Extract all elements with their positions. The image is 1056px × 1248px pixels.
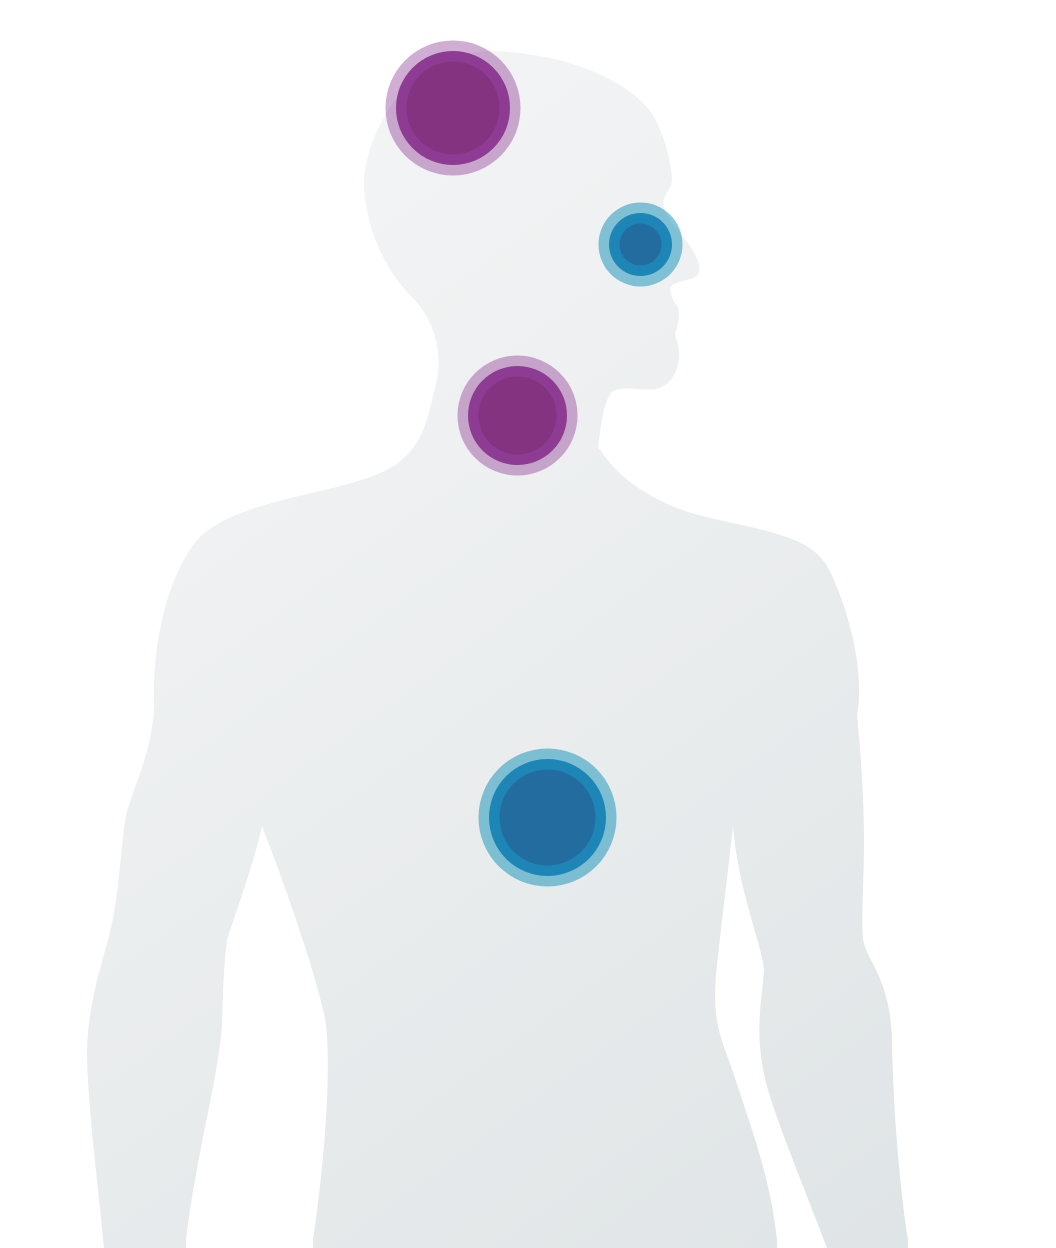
marker: eye, blue: [598, 202, 682, 286]
marker: throat, purple: [458, 356, 578, 476]
marker: abdomen, blue: [478, 748, 616, 886]
marker: head, purple: [386, 40, 520, 176]
body silhouette: [87, 51, 908, 1248]
